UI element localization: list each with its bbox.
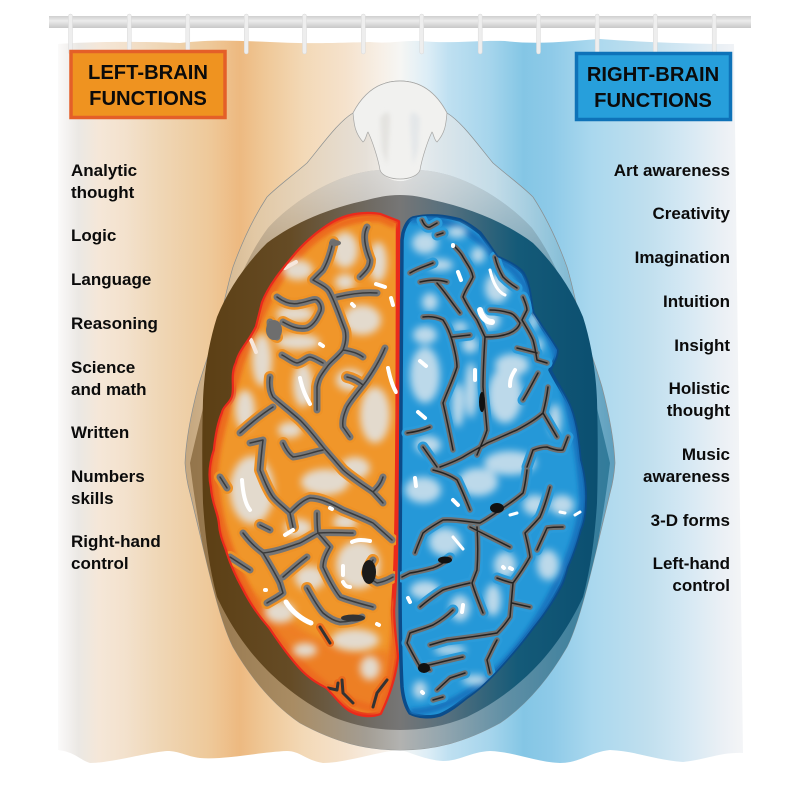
left-brain function list: Analytic	[71, 161, 137, 180]
forehead bump detail	[353, 81, 447, 179]
left sulci	[220, 227, 393, 707]
left hemisphere outline	[211, 214, 398, 715]
left-brain function list: Written	[71, 423, 129, 442]
right glossy highlights	[408, 245, 580, 693]
right gyri highlights	[405, 226, 574, 699]
curtain background gradient	[58, 39, 743, 763]
left edge tones	[214, 218, 396, 710]
ring top highlight	[218, 170, 582, 347]
head diagram	[185, 81, 615, 750]
right hemisphere outline	[400, 216, 585, 717]
right heading box: RIGHT-BRAIN	[587, 64, 719, 86]
right-brain function list	[614, 161, 731, 595]
left dark folds	[266, 240, 376, 622]
right heading box	[576, 54, 730, 120]
left-brain function list: Numbers	[71, 467, 145, 486]
ring around skull	[190, 170, 610, 750]
right dark folds	[418, 392, 504, 673]
right brain hemisphere	[400, 216, 585, 717]
left-brain function list: control	[71, 554, 129, 573]
shower rod	[49, 16, 751, 28]
right-brain function list: 3-D forms	[651, 511, 730, 530]
left-brain function list: Logic	[71, 226, 116, 245]
left-brain function list: Language	[71, 270, 151, 289]
right-brain function list: Holistic	[669, 379, 730, 398]
left-brain function list	[71, 161, 161, 573]
left-brain function list: skills	[71, 489, 114, 508]
left heading box: FUNCTIONS	[89, 88, 207, 110]
right-brain function list: Art awareness	[614, 161, 730, 180]
left-brain function list: Right-hand	[71, 532, 161, 551]
left gyri highlights	[230, 232, 390, 680]
right-brain function list: Left-hand	[653, 554, 730, 573]
right-brain function list: Insight	[674, 336, 730, 355]
right-brain function list: thought	[667, 401, 730, 420]
right edge tones	[410, 219, 583, 712]
left-brain function list: Science	[71, 358, 135, 377]
right-brain function list: Creativity	[653, 204, 731, 223]
right-brain function list: control	[672, 576, 730, 595]
left-brain function list: Reasoning	[71, 314, 158, 333]
right heading box: FUNCTIONS	[594, 90, 712, 112]
right-brain function list: Intuition	[663, 292, 730, 311]
left-brain function list: and math	[71, 380, 147, 399]
shower hooks	[68, 14, 716, 54]
right-brain function list: Music	[682, 445, 730, 464]
left brain hemisphere	[211, 214, 398, 715]
right sulci	[402, 220, 568, 700]
orange lower shade	[258, 596, 388, 715]
left glossy highlights	[242, 262, 396, 625]
dark skull interior	[202, 195, 598, 730]
left-brain function list: thought	[71, 183, 135, 202]
left heading box: LEFT-BRAIN	[88, 62, 208, 84]
left heading box	[71, 52, 225, 118]
head outer silhouette	[185, 81, 615, 750]
right-brain function list: awareness	[643, 467, 730, 486]
right-brain function list: Imagination	[635, 248, 730, 267]
